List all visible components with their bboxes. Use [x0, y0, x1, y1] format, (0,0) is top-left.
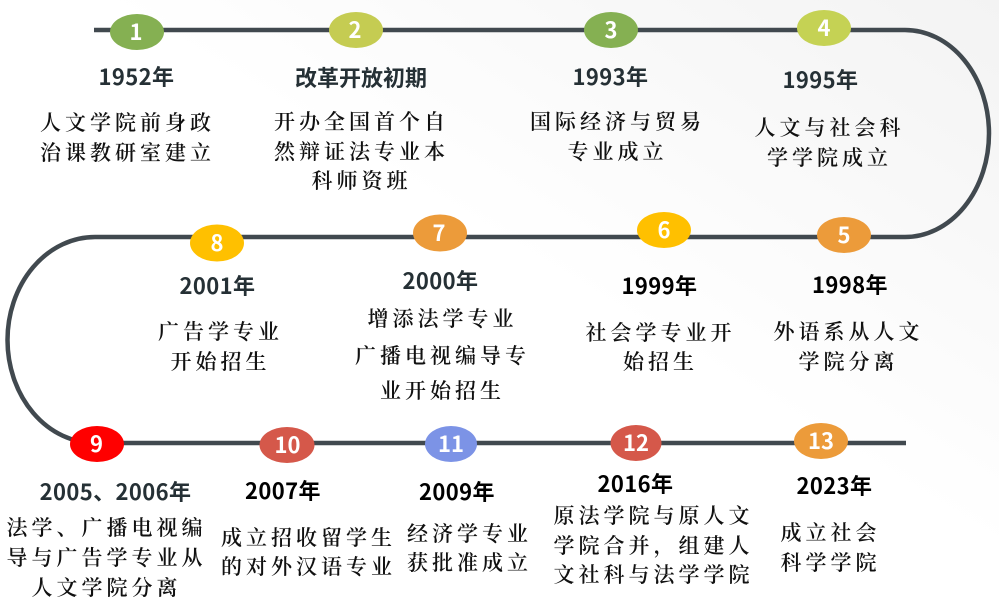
description 11: 获批准成立 — [407, 547, 532, 577]
year 2007: 2007年 — [245, 474, 321, 506]
node 3: 3 — [605, 13, 617, 45]
description 10: 成立招收留学生 — [221, 522, 396, 552]
description 1: 人文学院前身政 — [40, 107, 215, 137]
description 9: 法学、广播电视编 — [6, 512, 206, 542]
milestone 4 — [754, 10, 904, 172]
node 6: 6 — [658, 213, 671, 245]
node 7 — [413, 214, 467, 252]
description 6: 社会学专业开 — [586, 317, 736, 347]
description 2: 然辩证法专业本 — [274, 136, 449, 166]
description 7: 业开始招生 — [380, 375, 505, 405]
milestone 6 — [586, 212, 736, 376]
node 1 — [110, 14, 164, 50]
description 7: 广播电视编导专 — [355, 340, 530, 370]
milestone 13 — [780, 423, 880, 577]
period heading: 改革开放初期 — [295, 61, 427, 93]
milestone 7 — [355, 214, 530, 405]
description 6: 始招生 — [623, 346, 698, 376]
node 13 — [794, 423, 848, 459]
milestone 1 — [40, 14, 215, 167]
milestone 11 — [407, 426, 532, 577]
year 2016: 2016年 — [598, 467, 673, 499]
node 4: 4 — [818, 11, 831, 43]
node 13: 13 — [808, 424, 834, 456]
description 9: 人文学院分离 — [32, 572, 182, 602]
description 12: 文社科与法学学院 — [554, 559, 754, 589]
node 7: 7 — [433, 216, 445, 248]
year 1993: 1993年 — [573, 60, 648, 92]
description 13: 科学学院 — [780, 547, 880, 577]
node 10 — [260, 427, 314, 463]
node 6 — [637, 212, 691, 248]
description 5: 学院分离 — [798, 346, 898, 376]
node 5 — [817, 217, 871, 253]
description 2: 科师资班 — [312, 165, 412, 195]
node 11: 11 — [438, 427, 464, 459]
year 2009: 2009年 — [419, 475, 495, 507]
description 12: 原法学院与原人文 — [554, 500, 754, 530]
description 1: 治课教研室建立 — [40, 137, 215, 167]
description 4: 人文与社会科 — [754, 112, 904, 142]
year 2005 and 2006: 2005、2006年 — [40, 475, 191, 507]
year 2000: 2000年 — [403, 264, 478, 296]
node 8 — [190, 224, 244, 262]
node 8: 8 — [211, 226, 223, 258]
year 1999: 1999年 — [622, 269, 697, 301]
milestone 8 — [158, 224, 283, 376]
year 1998: 1998年 — [812, 268, 888, 300]
description 5: 外语系从人文 — [774, 316, 924, 346]
node 11 — [425, 426, 477, 462]
description 12: 学院合并，组建人 — [554, 530, 754, 560]
node 12: 12 — [623, 426, 649, 458]
year 1952: 1952年 — [99, 60, 174, 92]
milestone 9 — [6, 426, 206, 602]
timeline path — [7, 30, 989, 443]
description 7: 增添法学专业 — [368, 303, 518, 333]
description 3: 专业成立 — [568, 136, 668, 166]
milestone 5 — [774, 217, 924, 376]
node 2: 2 — [349, 13, 361, 45]
year 1995: 1995年 — [783, 63, 858, 95]
year 2001: 2001年 — [180, 269, 255, 301]
node 9 — [70, 426, 124, 462]
milestone 2 — [274, 12, 449, 195]
node 2 — [329, 12, 383, 48]
description 10: 的对外汉语专业 — [221, 551, 396, 581]
description 9: 导与广告学专业从 — [6, 542, 206, 572]
milestone 3 — [530, 12, 705, 166]
node 4 — [797, 10, 851, 46]
milestone 10 — [221, 427, 396, 581]
year 2023: 2023年 — [797, 469, 872, 501]
description 8: 广告学专业 — [158, 316, 283, 346]
description 4: 学学院成立 — [767, 142, 892, 172]
description 2: 开办全国首个自 — [274, 106, 449, 136]
node 5: 5 — [838, 218, 850, 250]
node 12 — [610, 425, 662, 461]
description 11: 经济学专业 — [407, 518, 532, 548]
description 8: 开始招生 — [170, 346, 270, 376]
description 3: 国际经济与贸易 — [530, 106, 705, 136]
milestone 12 — [554, 425, 754, 589]
node 9: 9 — [90, 427, 103, 459]
node 3 — [584, 12, 638, 48]
node 10: 10 — [275, 428, 300, 460]
description 13: 成立社会 — [780, 517, 880, 547]
node 1: 1 — [130, 15, 142, 47]
